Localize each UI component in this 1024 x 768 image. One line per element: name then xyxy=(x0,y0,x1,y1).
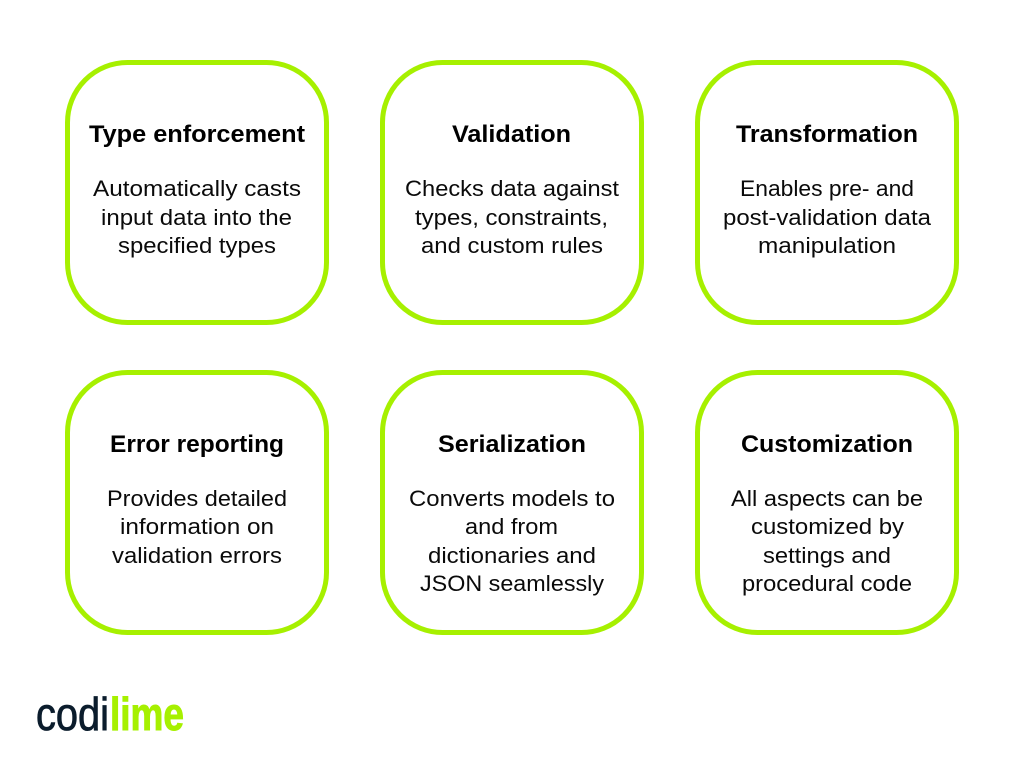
logo: codilime: codi xyxy=(36,688,109,740)
text: error reporting description: Provides detailed xyxy=(107,486,287,511)
heading: error reporting: Error reporting xyxy=(110,431,284,458)
text: error reporting description: information on xyxy=(120,514,274,539)
text: customization description xyxy=(731,486,923,596)
heading: serialization: Serialization xyxy=(438,431,586,458)
text: validation description: and custom rules xyxy=(421,233,603,258)
text: type enforcement description: Automatically casts xyxy=(93,176,301,201)
heading: validation: Validation xyxy=(452,121,571,148)
text: error reporting description xyxy=(107,486,287,568)
text: serialization description: JSON seamlessly xyxy=(420,571,605,596)
text: serialization description xyxy=(409,486,615,596)
text: serialization description: dictionaries and xyxy=(428,543,596,568)
logo: codilime xyxy=(36,688,184,740)
text: customization description: customized by xyxy=(751,514,905,539)
text: type enforcement description: input data into the xyxy=(101,205,292,230)
text: transformation description: post-validation data xyxy=(723,205,932,230)
text: serialization description: and from xyxy=(465,514,558,539)
panel: transformation xyxy=(698,62,956,322)
panel: validation xyxy=(382,62,642,322)
logo: codilime: lime xyxy=(110,688,184,740)
text: transformation description xyxy=(723,176,932,258)
text: transformation description: Enables pre- and xyxy=(740,176,914,201)
text: type enforcement description: specified types xyxy=(118,233,276,258)
text: type enforcement description xyxy=(93,176,301,258)
text: validation description: types, constraints, xyxy=(415,205,608,230)
text: transformation description: manipulation xyxy=(758,233,896,258)
text: validation description xyxy=(405,176,620,258)
panel: customization xyxy=(698,372,956,632)
text: error reporting description: validation errors xyxy=(112,543,282,568)
heading: type enforcement: Type enforcement xyxy=(89,121,305,148)
panel: error reporting xyxy=(68,372,326,632)
text: customization description: procedural code xyxy=(742,571,912,596)
text: serialization description: Converts models to xyxy=(409,486,615,511)
text: customization description: All aspects can be xyxy=(731,486,923,511)
heading: customization: Customization xyxy=(741,431,913,458)
heading: transformation: Transformation xyxy=(736,121,918,148)
panel: serialization xyxy=(382,372,642,632)
panel: type enforcement xyxy=(68,62,326,322)
text: customization description: settings and xyxy=(763,543,891,568)
text: validation description: Checks data against xyxy=(405,176,620,201)
